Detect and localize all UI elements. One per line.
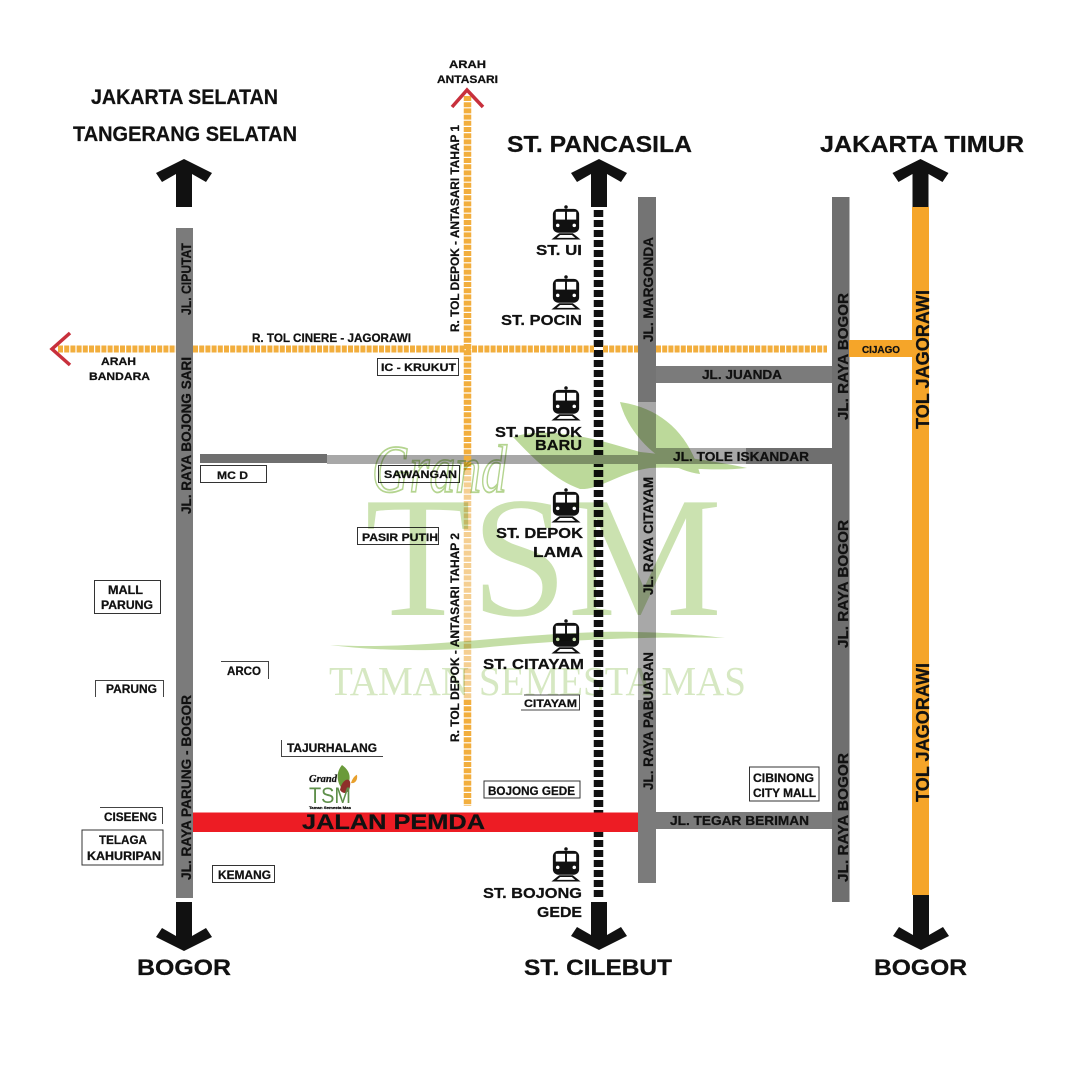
label: Arah Bandara: BANDARA [89,371,150,383]
label: Jl. Raya Pabuaran: JL. RAYA PABUARAN [640,652,656,790]
place: Cibinong City Mall: CIBINONG [753,773,814,785]
icon: small TSM logo: Grand [309,773,337,785]
place: Telaga Kahuripan [82,830,163,865]
arrow: north centre [571,159,627,207]
watermark: Grand TSM Taman Semesta Mas logo: Grand [372,431,508,507]
label: Cijago: CIJAGO [862,344,900,356]
place: Ciseeng [100,808,162,824]
label: Jl. Ciputat: JL. CIPUTAT [178,243,194,315]
place: Kemang [212,866,274,882]
station: St. Depok Lama: ST. DEPOK [496,525,583,542]
label: Arah Bandara [89,356,150,383]
place: Kemang: KEMANG [218,870,271,882]
place: Parung: PARUNG [106,684,157,696]
place: Mall Parung: PARUNG [101,600,153,612]
heading: Tangerang Selatan: TANGERANG SELATAN [73,123,297,146]
toll road: Antasari vertical [464,96,471,806]
place: Cibinong City Mall [750,767,819,801]
station: St. Depok Lama [496,488,583,561]
icon: small TSM logo [309,765,357,810]
label: Jl. Raya Bogor upper: JL. RAYA BOGOR [835,293,852,420]
icon: small TSM logo: TSM [309,783,351,808]
label: Jl. Tole Iskandar: JL. TOLE ISKANDAR [673,449,810,464]
station: St. Pocin: ST. POCIN [501,312,582,329]
station: St. Depok Lama: LAMA [533,544,583,561]
watermark: Grand TSM Taman Semesta Mas logo: TSM [365,463,722,653]
toll road: Cinere Jagorawi horizontal [58,346,827,352]
heading: Jakarta Selatan: JAKARTA SELATAN [91,86,278,109]
arrow: red west [52,333,70,365]
place: Parung [96,680,164,697]
station: St. Depok Baru [495,386,582,454]
place: Mall Parung: MALL [108,585,143,597]
icon: small TSM logo: Taman Semesta Mas [309,805,352,810]
label: Tol Depok Antasari 1: R. TOL DEPOK - ANTASARI TAHAP 1 [448,125,462,332]
road: Tol Jagorawi [912,207,929,895]
label: Arah Antasari: ANTASARI [437,74,498,86]
heading: Bogor right: BOGOR [874,955,967,980]
arrow: south centre [571,902,627,950]
label: Jl. Tegar Beriman: JL. TEGAR BERIMAN [670,813,809,828]
road: Jl. Juanda [656,366,832,383]
station: St. Bojong Gede: ST. BOJONG [483,885,582,902]
road: Jl. Margonda and Pabuaran [638,197,656,883]
station: St. Pocin [501,275,582,329]
place: IC Krukut: IC - KRUKUT [381,362,456,374]
label: Tol Jagorawi lower: TOL JAGORAWI [913,663,933,802]
station: St. UI: ST. UI [536,242,582,259]
label: Arah Bandara: ARAH [101,356,136,368]
road: Jl. Raya Bogor [832,197,850,902]
label: Jalan Pemda: JALAN PEMDA [302,811,485,834]
heading: Jakarta Timur: JAKARTA TIMUR [820,131,1024,157]
place: Ciseeng: CISEENG [104,812,157,824]
watermark: Grand TSM Taman Semesta Mas logo [329,402,747,704]
arrow: north left [156,159,212,207]
label: Tol Jagorawi upper: TOL JAGORAWI [913,290,933,429]
station: St. Bojong Gede [483,847,582,921]
railway line [594,210,603,900]
arrow: south left [156,902,212,951]
road: Jalan Pemda [193,812,638,832]
place: Pasir Putih: PASIR PUTIH [362,532,438,544]
label: Jl. Raya Bojong Sari: JL. RAYA BOJONG SARI [178,357,194,514]
label: Arah Antasari [437,59,498,86]
station: St. Citayam: ST. CITAYAM [483,656,584,673]
place: Tajurhalang: TAJURHALANG [287,743,377,755]
place: Sawangan: SAWANGAN [384,469,457,481]
road: Cijago link [849,340,912,357]
arrow: red north [452,90,483,107]
station: St. Citayam [483,619,584,673]
label: Jl. Raya Bogor middle: JL. RAYA BOGOR [835,520,852,648]
place: Sawangan [378,466,460,482]
place: Pasir Putih [358,528,438,544]
place: Tajurhalang [282,740,383,756]
place: Arco: ARCO [227,666,261,678]
place: Citayam [521,695,580,710]
road: Jl. Raya Parung Bogor [176,228,193,898]
label: Arah Antasari: ARAH [449,59,486,71]
label: Jl. Margonda: JL. MARGONDA [640,237,656,342]
label: Jl. Raya Parung Bogor: JL. RAYA PARUNG - BOGOR [178,695,194,880]
place: Bojong Gede: BOJONG GEDE [488,786,575,798]
heading: St. Pancasila: ST. PANCASILA [507,131,692,157]
label: Jl. Raya Bogor lower: JL. RAYA BOGOR [835,753,852,882]
station: St. Depok Baru: ST. DEPOK [495,424,582,441]
arrow: north right [892,159,948,207]
road: Jl. Tole Iskandar [200,448,832,464]
place: Bojong Gede [484,781,580,798]
station: St. UI [536,205,582,259]
label: Jl. Raya Citayam: JL. RAYA CITAYAM [640,477,656,595]
heading: Bogor left: BOGOR [137,955,231,980]
arrow: south right [893,895,949,950]
place: Arco [221,662,268,679]
place: Telaga Kahuripan: KAHURIPAN [87,851,161,863]
label: Tol Depok Antasari 2: R. TOL DEPOK - ANTASARI TAHAP 2 [448,533,462,742]
label: Jl. Juanda: JL. JUANDA [702,367,783,382]
place: Mall Parung [94,580,160,614]
place: McD: MC D [217,470,248,482]
watermark: Grand TSM Taman Semesta Mas logo: TAMAN SEMESTA MAS [329,658,746,704]
place: McD [200,466,266,482]
place: Citayam: CITAYAM [524,698,577,710]
road: Jl. Tegar Beriman [656,812,832,829]
place: Cibinong City Mall: CITY MALL [753,788,816,800]
heading: St. Cilebut: ST. CILEBUT [524,955,673,980]
place: IC Krukut [378,358,458,376]
station: St. Bojong Gede: GEDE [537,904,582,921]
place: Telaga Kahuripan: TELAGA [99,835,147,847]
label: R. Tol Cinere Jagorawi: R. TOL CINERE - JAGORAWI [252,331,411,345]
station: St. Depok Baru: BARU [535,437,582,454]
